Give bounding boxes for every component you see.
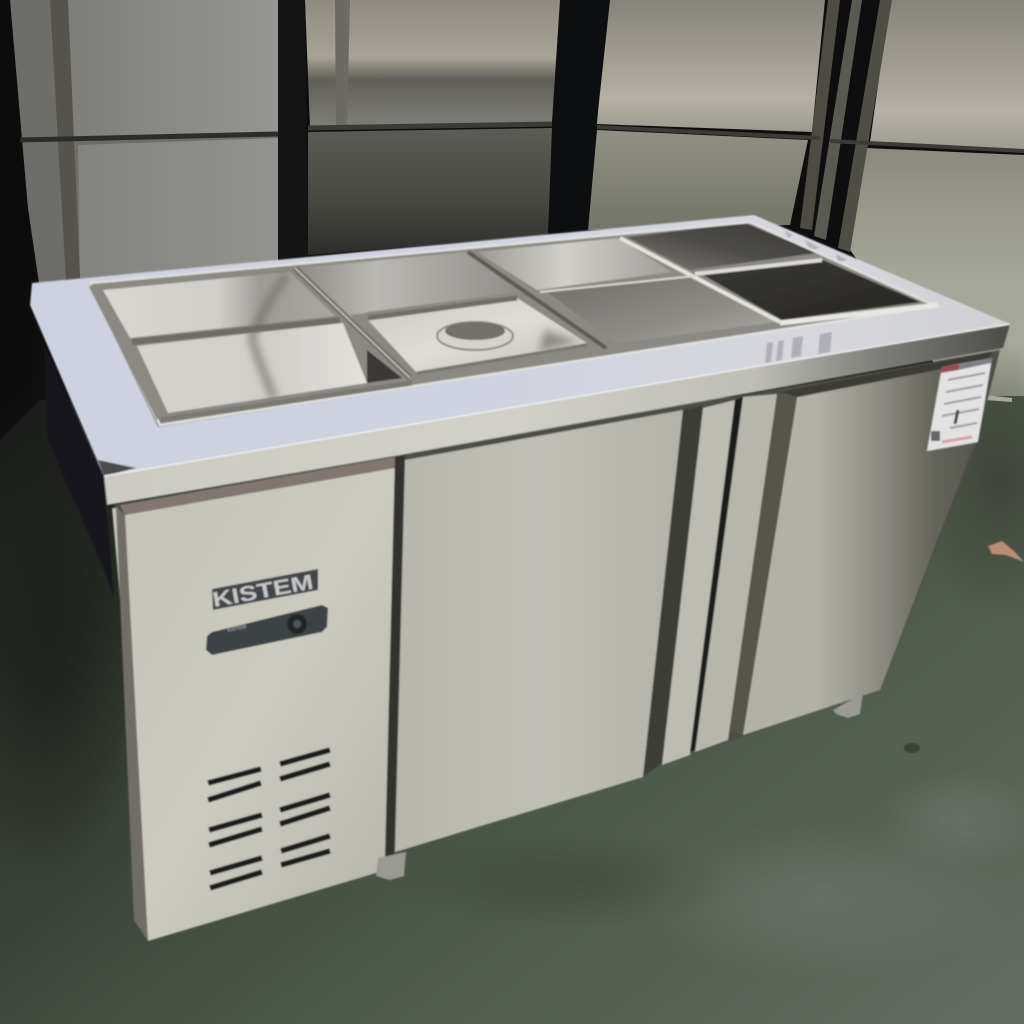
pan reflection streak [252, 274, 287, 398]
logo: KISTEM [211, 569, 318, 612]
refrigerated counter [30, 215, 1010, 941]
side strip [112, 508, 122, 600]
pan: rear centre [477, 238, 672, 290]
metal bar behind label [985, 395, 1012, 402]
pan: front left long [137, 323, 367, 413]
counter feet [376, 693, 863, 880]
control strip [206, 605, 328, 655]
gap between panel and door [385, 455, 405, 858]
pan: rear right dark [627, 223, 817, 270]
dry leaf on floor [988, 541, 1024, 562]
pan: front right dark [703, 260, 920, 320]
front door 1 [395, 410, 683, 852]
logo: KISTEM: KISTEM [211, 571, 315, 612]
specification label [927, 358, 992, 451]
pan: centre open [547, 277, 777, 343]
counter left side [44, 345, 114, 598]
left compressor panel [125, 468, 395, 941]
under-lip strip [120, 457, 395, 515]
ventilation slots [208, 750, 330, 888]
floor [0, 340, 1024, 1024]
worktop surface [30, 215, 1010, 476]
pan: back left long [103, 272, 335, 338]
worktop front edge [104, 324, 1010, 505]
control strip: KISTEM [227, 624, 247, 634]
worktop corner shadow [98, 460, 136, 476]
worktop reflections [765, 231, 848, 363]
front door 2 [743, 357, 985, 735]
pan frame rails [90, 222, 938, 425]
lidded pan [350, 294, 606, 378]
door handle recess [643, 391, 798, 777]
well frame [88, 222, 938, 427]
pan: back middle [298, 252, 520, 320]
counter body backing [115, 350, 1000, 925]
